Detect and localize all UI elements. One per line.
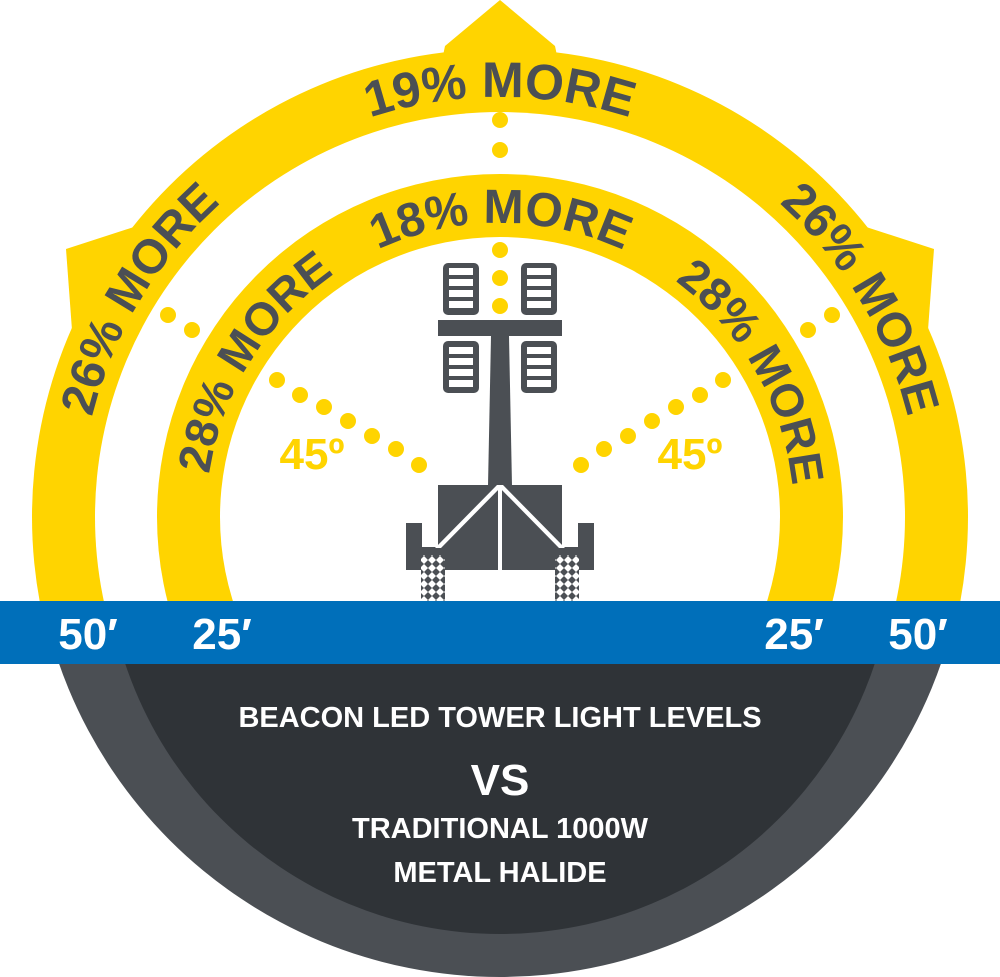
ring labels: 18% MORE [370,190,634,250]
ring labels: 28% MORE [676,260,824,484]
ring labels: 28% MORE [179,250,333,473]
blue distance bar: 50′ [888,610,948,659]
ring labels [62,62,940,484]
bottom title text: TRADITIONAL 1000W [352,813,649,845]
45 degree labels [279,430,723,479]
yellow rings [32,0,968,601]
blue distance bar [0,601,1000,664]
bottom title text: METAL HALIDE [393,857,607,889]
blue distance bar: 25′ [192,610,252,659]
bottom title text [238,702,762,889]
tower light icon [406,263,594,601]
ring labels: 26% MORE [780,184,940,416]
ring labels: 26% MORE [62,181,220,416]
45 degree labels: 45º [279,430,345,479]
dots [160,112,840,473]
blue distance bar: 50′ [58,610,118,659]
45 degree labels: 45º [657,430,723,479]
bottom title text: VS [471,756,529,805]
bottom title text: BEACON LED TOWER LIGHT LEVELS [238,702,762,734]
ring labels: 19% MORE [365,62,636,117]
outer gray bottom disc [59,664,941,977]
blue distance bar: 25′ [764,610,824,659]
